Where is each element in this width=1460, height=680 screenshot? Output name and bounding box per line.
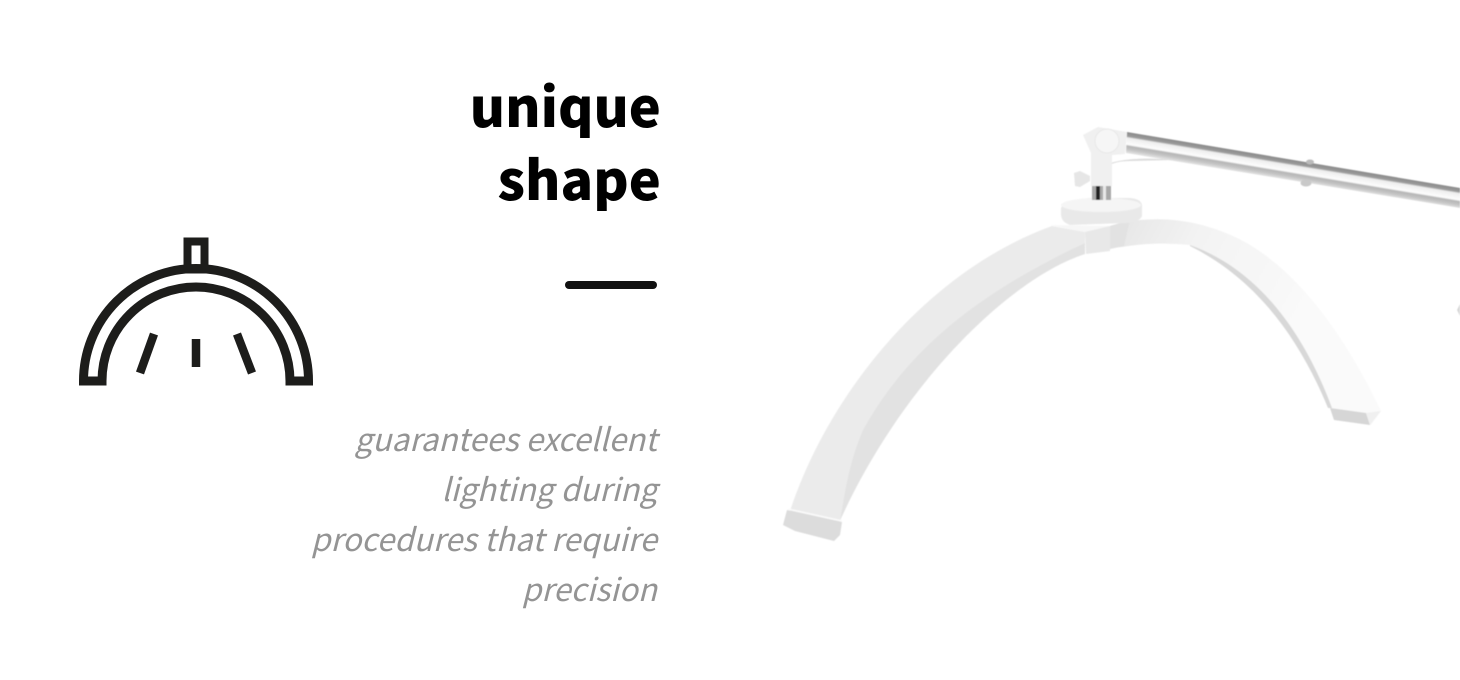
far edge fragment bbox=[1457, 304, 1460, 316]
icon: arc lamp bbox=[79, 238, 313, 386]
title: unique bbox=[470, 64, 661, 143]
divider rule bbox=[565, 281, 657, 289]
title: shape bbox=[497, 137, 661, 216]
description text bbox=[311, 415, 660, 611]
title bbox=[470, 64, 661, 216]
description text: procedures that require bbox=[311, 515, 657, 561]
centre connector and base bbox=[1050, 198, 1142, 254]
description text: guarantees excellent bbox=[354, 415, 657, 461]
description text: precision bbox=[522, 565, 657, 611]
right arc arm bbox=[1110, 219, 1381, 425]
arm rod bbox=[1107, 132, 1460, 208]
description text: lighting during bbox=[441, 465, 657, 511]
swivel joint bbox=[1074, 127, 1127, 200]
left arc arm bbox=[783, 226, 1085, 541]
